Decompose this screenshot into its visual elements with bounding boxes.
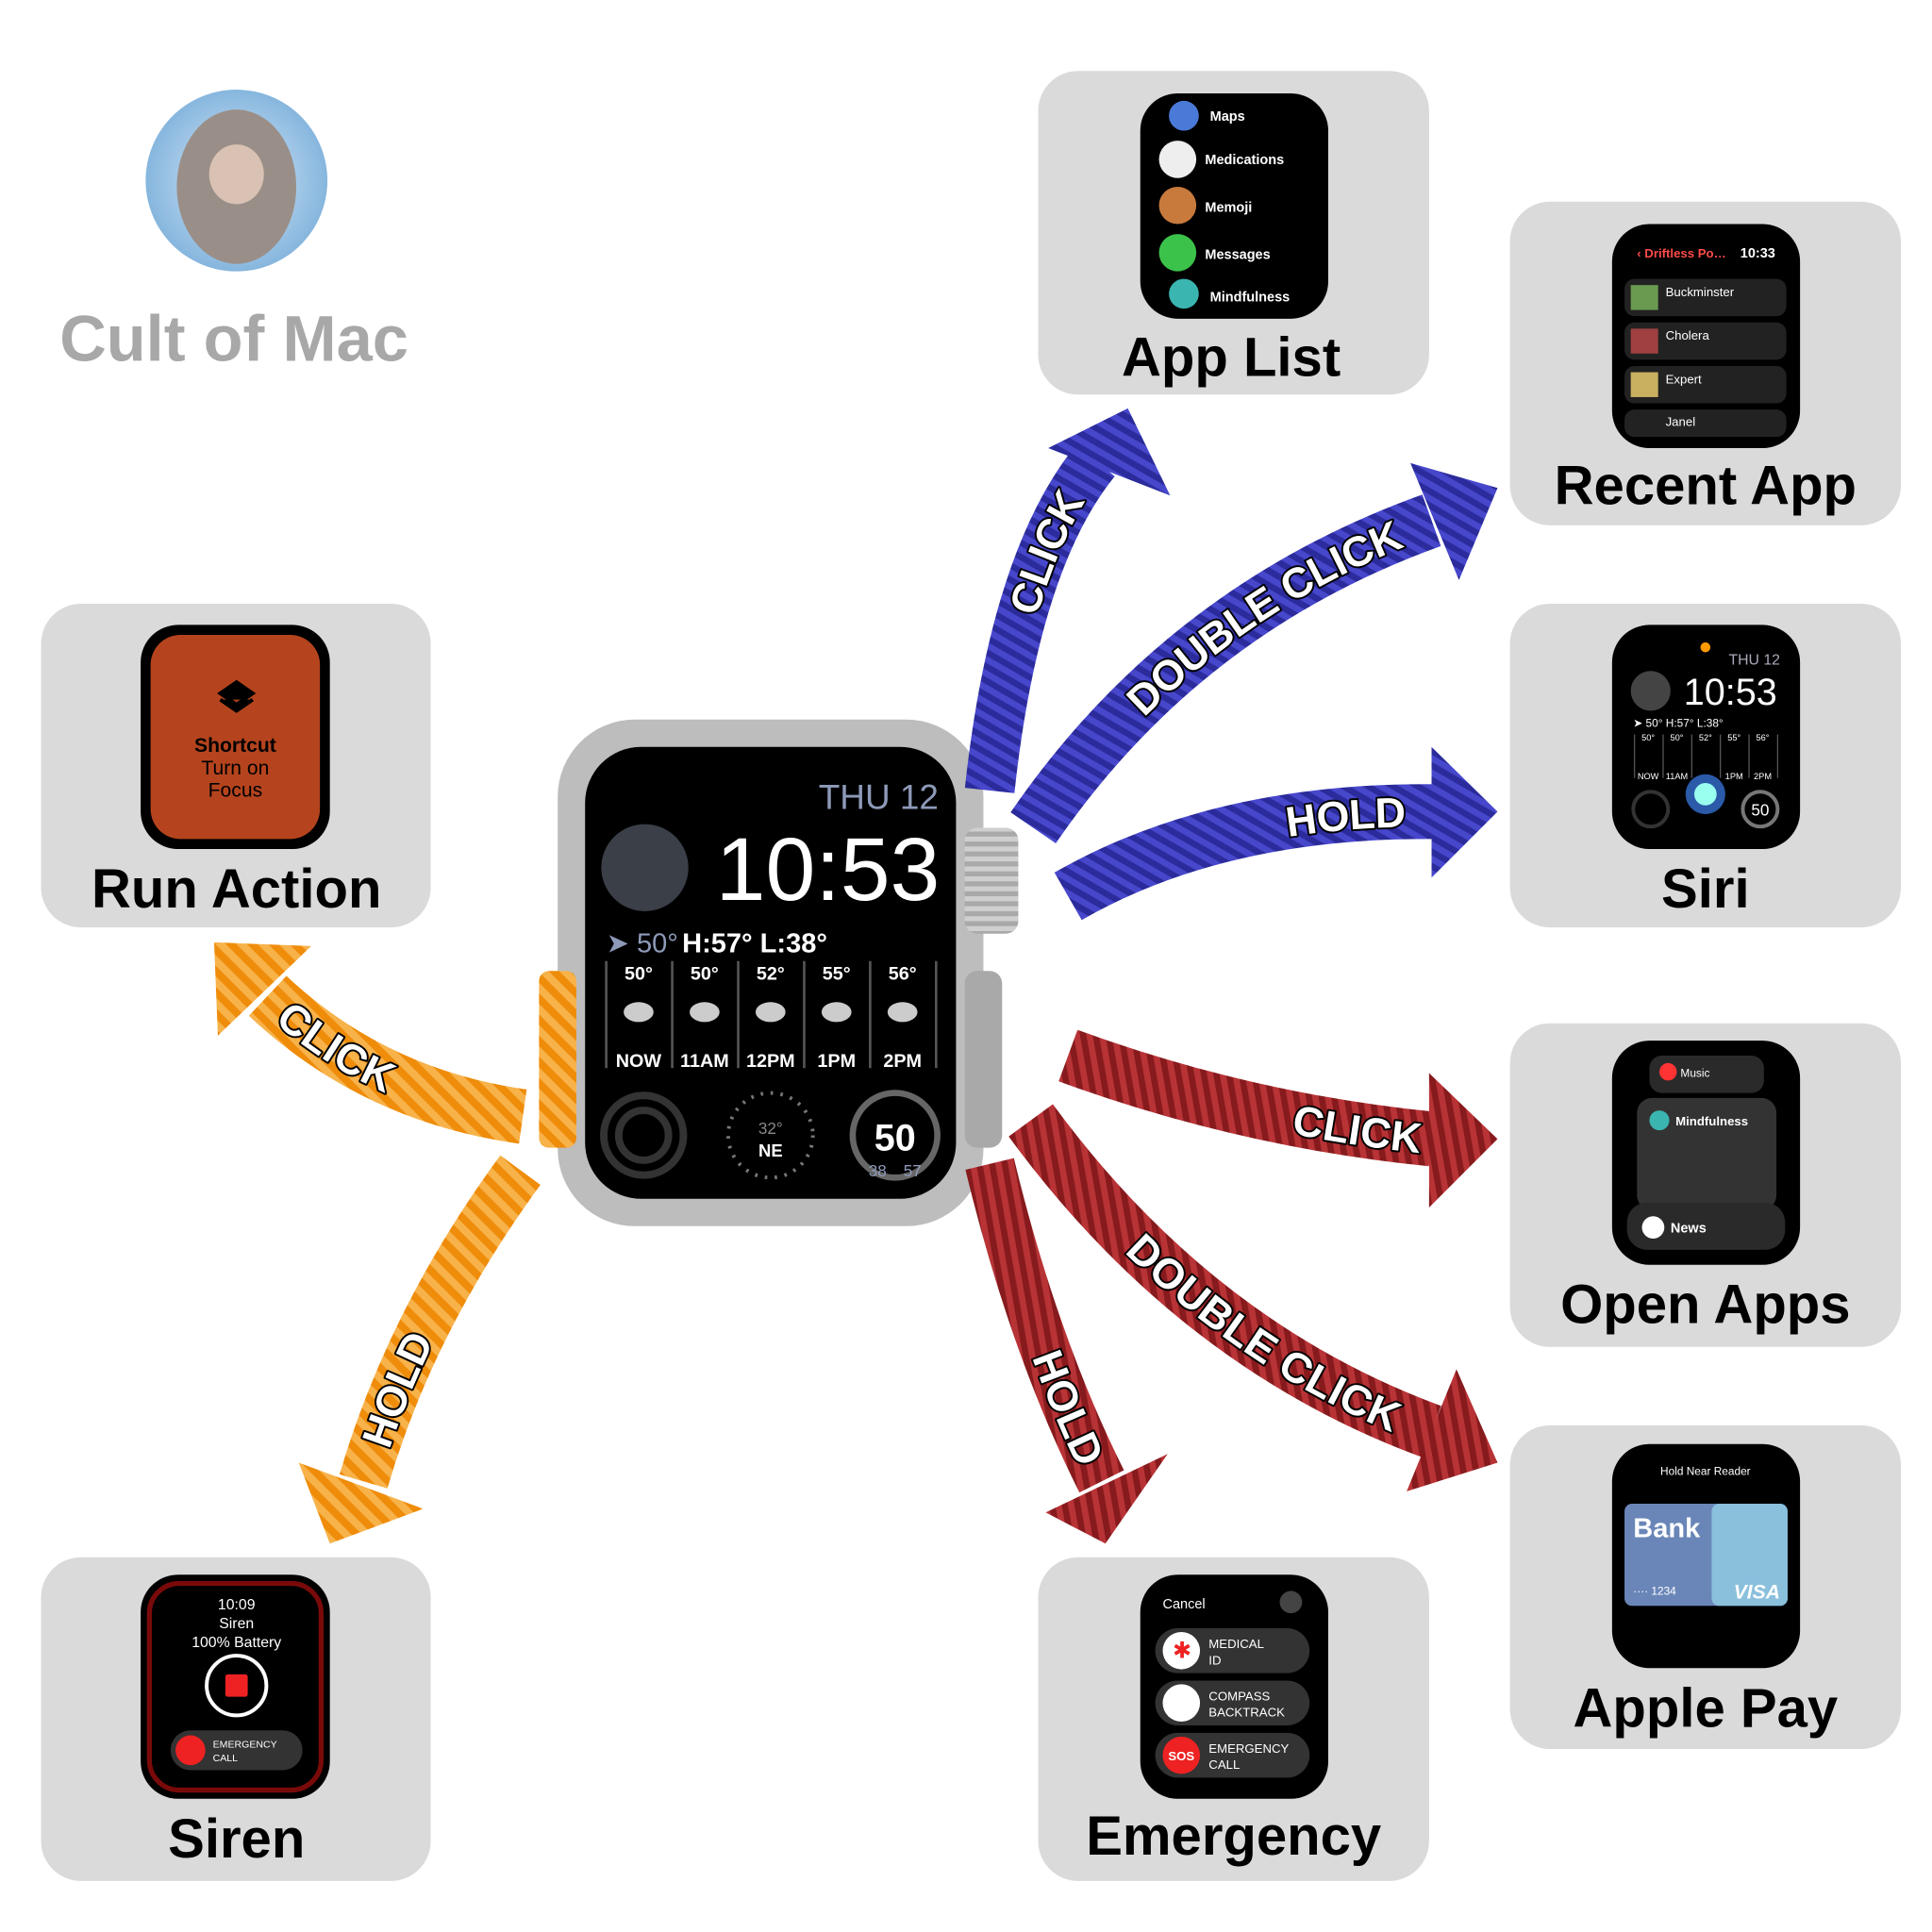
panel: Emergency: EMERGENCY bbox=[1208, 1741, 1290, 1756]
panel: App List: Mindfulness bbox=[1210, 290, 1290, 305]
panel: Emergency: CALL bbox=[1208, 1757, 1240, 1772]
arrow: orange click to Run Action: CLICK bbox=[278, 1004, 399, 1095]
panel: Siri: ➤ 50° H:57° L:38° bbox=[1633, 717, 1724, 730]
arrow: red click to Open Apps: CLICK bbox=[1292, 1106, 1424, 1155]
panel: Siri: 52° bbox=[1699, 733, 1712, 742]
logo: Cult of Mac bbox=[59, 90, 408, 375]
central watch: 1PM bbox=[817, 1051, 856, 1072]
central watch: 55° bbox=[823, 964, 851, 985]
arrow: blue double click to Recent App bbox=[1010, 462, 1498, 843]
panel: Siri: Siri bbox=[1661, 858, 1750, 920]
panel: App List bbox=[1039, 71, 1429, 394]
arrow: blue hold to Siri: HOLD bbox=[1285, 796, 1406, 839]
panel: Siri: 50° bbox=[1641, 733, 1655, 742]
panel: Recent App: ‹ Driftless Po… bbox=[1637, 246, 1726, 260]
panel: Emergency: BACKTRACK bbox=[1208, 1706, 1285, 1720]
panel: Open Apps: Mindfulness bbox=[1675, 1114, 1748, 1128]
panel: Run Action bbox=[42, 604, 431, 927]
panel: Emergency: ✱ bbox=[1173, 1639, 1191, 1664]
panel: Run Action: Run Action bbox=[92, 858, 381, 920]
panel: Apple Pay: VISA bbox=[1734, 1581, 1780, 1603]
panel: Open Apps: Music bbox=[1680, 1066, 1709, 1079]
panel: App List: Medications bbox=[1205, 153, 1284, 168]
central watch: 50° bbox=[625, 964, 653, 985]
panel: Emergency bbox=[1039, 1557, 1429, 1881]
panel: Siri: 2PM bbox=[1754, 772, 1772, 781]
central watch: 2PM bbox=[883, 1051, 922, 1072]
panel: Siri: 11AM bbox=[1666, 772, 1688, 781]
panel: Recent App: 10:33 bbox=[1740, 246, 1775, 261]
arrow: red hold to Emergency bbox=[966, 1158, 1168, 1543]
panel: Siri: NOW bbox=[1638, 772, 1659, 781]
panel: Open Apps bbox=[1510, 1024, 1901, 1347]
panel: Run Action: Turn on bbox=[201, 758, 269, 779]
central watch: 57 bbox=[904, 1161, 922, 1180]
panel: Siren: CALL bbox=[213, 1753, 238, 1764]
central watch bbox=[539, 720, 1018, 1226]
central watch: 50° bbox=[691, 964, 719, 985]
panel: Apple Pay: Apple Pay bbox=[1574, 1677, 1838, 1739]
panel: Emergency: Emergency bbox=[1086, 1806, 1381, 1867]
panel: Emergency: Cancel bbox=[1162, 1597, 1206, 1612]
panel: Siren: 100% Battery bbox=[192, 1635, 281, 1651]
panel: Siren bbox=[42, 1557, 431, 1881]
panel: Siri: 10:53 bbox=[1684, 672, 1777, 713]
panel: App List: Maps bbox=[1210, 109, 1245, 125]
arrow: blue click to App List: CLICK bbox=[1010, 486, 1087, 614]
arrow: blue click to App List bbox=[964, 408, 1170, 793]
panel: Emergency: MEDICAL bbox=[1208, 1637, 1264, 1651]
arrow: red double click to Apple Pay: DOUBLE CLICK bbox=[1124, 1231, 1405, 1434]
panel: Siri bbox=[1510, 604, 1901, 927]
central watch: NOW bbox=[616, 1051, 661, 1072]
central watch: 38 bbox=[869, 1161, 887, 1180]
panel: Apple Pay: Hold Near Reader bbox=[1660, 1465, 1751, 1478]
panel: Apple Pay bbox=[1510, 1425, 1901, 1749]
central watch: 12PM bbox=[746, 1051, 795, 1072]
panel: Recent App: Janel bbox=[1666, 414, 1695, 428]
arrow: red click to Open Apps bbox=[1058, 1030, 1498, 1208]
panel: Recent App: Buckminster bbox=[1666, 285, 1735, 299]
panel: Emergency: SOS bbox=[1168, 1749, 1194, 1763]
arrow: blue hold to Siri bbox=[1055, 747, 1498, 921]
panel: App List: Messages bbox=[1205, 247, 1271, 262]
arrow: orange hold to Siren: HOLD bbox=[360, 1332, 431, 1449]
panel: Emergency: COMPASS bbox=[1208, 1690, 1270, 1704]
central watch: 56° bbox=[889, 964, 917, 985]
panel: Recent App bbox=[1510, 202, 1901, 525]
panel: Siren: 10:09 bbox=[218, 1597, 256, 1613]
central watch: THU 12 bbox=[819, 778, 939, 817]
panel: Apple Pay: ···· 1234 bbox=[1633, 1584, 1676, 1597]
central watch: H:57° L:38° bbox=[682, 928, 827, 958]
panel: App List: Memoji bbox=[1205, 200, 1252, 215]
panel: Open Apps: News bbox=[1671, 1221, 1707, 1236]
panel: Recent App: Cholera bbox=[1666, 328, 1709, 342]
panel: Siri: 1PM bbox=[1725, 772, 1743, 781]
panel: Siri: 55° bbox=[1727, 733, 1740, 742]
arrow: blue double click to Recent App: DOUBLE CLICK bbox=[1124, 519, 1407, 718]
arrow: red double click to Apple Pay bbox=[1008, 1104, 1498, 1491]
panel: Siren: Siren bbox=[219, 1616, 254, 1632]
arrow: orange hold to Siren bbox=[298, 1155, 541, 1543]
central watch: 32° bbox=[758, 1119, 783, 1138]
panel: Siren: EMERGENCY bbox=[213, 1740, 277, 1751]
panel: App List: App List bbox=[1122, 327, 1341, 389]
panel: Recent App: Recent App bbox=[1555, 455, 1857, 516]
arrow: red hold to Emergency: HOLD bbox=[1030, 1347, 1102, 1464]
central watch: 52° bbox=[757, 964, 785, 985]
panel: Siren: Siren bbox=[168, 1808, 305, 1870]
logo: Cult of Mac: Cult of Mac bbox=[59, 303, 408, 375]
central watch: 50 bbox=[874, 1117, 916, 1158]
arrow: orange click to Run Action bbox=[214, 941, 526, 1143]
panel: Apple Pay: Bank bbox=[1633, 1514, 1701, 1544]
panel: Siri: 50 bbox=[1751, 800, 1769, 819]
central watch: 10:53 bbox=[716, 820, 940, 920]
panel: Open Apps: Open Apps bbox=[1560, 1274, 1851, 1336]
panel: Siri: THU 12 bbox=[1728, 653, 1780, 669]
panel: Siri: 50° bbox=[1671, 733, 1684, 742]
panel: Recent App: Expert bbox=[1666, 372, 1702, 386]
panel: Run Action: Focus bbox=[208, 780, 262, 802]
central watch: NE bbox=[758, 1141, 783, 1160]
panel: Siri: 56° bbox=[1757, 733, 1770, 742]
central watch: ➤ 50° bbox=[607, 928, 678, 958]
central watch: 11AM bbox=[680, 1051, 729, 1072]
panel: Emergency: ID bbox=[1208, 1653, 1222, 1667]
panel: Run Action: Shortcut bbox=[194, 735, 276, 757]
